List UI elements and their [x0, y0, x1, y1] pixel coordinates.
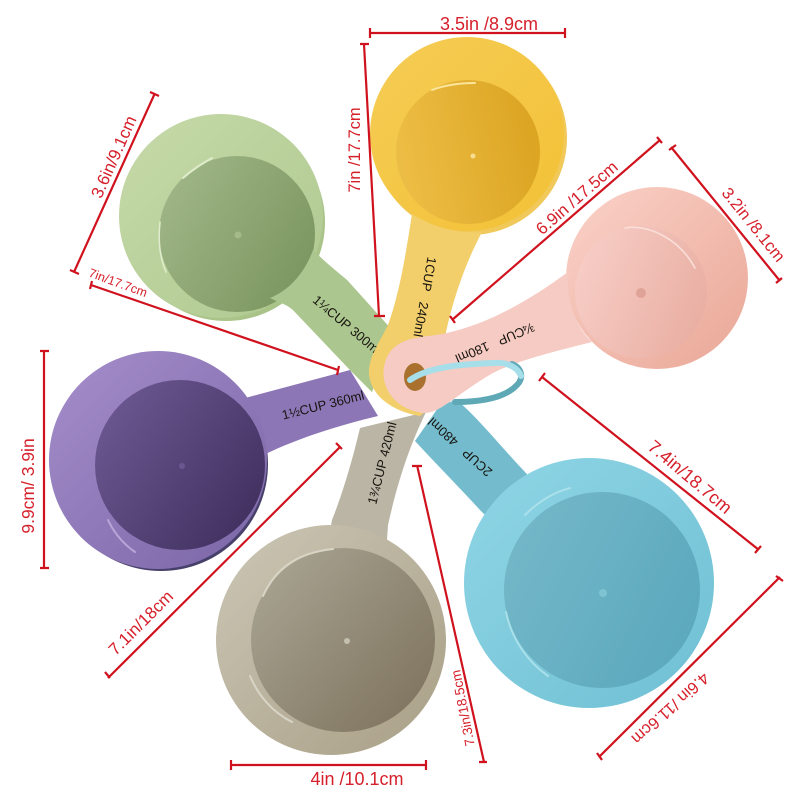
dimension: pink length [450, 137, 662, 323]
cup: blue 2 cup: 2CUP 480ml [425, 414, 495, 480]
cup: yellow 1 cup [369, 37, 567, 416]
cup: yellow 1 cup: 1CUP 240ml [411, 256, 439, 338]
dimension: green width: 3.6in/9.1cm [87, 113, 141, 201]
cup: taupe 1 3/4 cup: 1¾CUP 420ml [365, 420, 400, 506]
dimension: purple width: 9.9cm/ 3.9in [18, 438, 38, 534]
dimension: yellow length [346, 44, 385, 316]
cup: blue 2 cup [415, 400, 714, 708]
dimension: green width [70, 92, 159, 274]
dimension: purple length: 7.1in/18cm [105, 587, 177, 659]
hanging hole [404, 363, 426, 391]
dimension: green length [87, 266, 339, 375]
cup: pink 3/4 cup [383, 187, 748, 413]
dimension: 3.5in [370, 14, 565, 38]
dimension: pink width [669, 145, 788, 283]
dimension: purple width [18, 351, 49, 568]
cup: green 1 1/4 cup [119, 114, 392, 392]
cup: taupe 1 3/4 cup [216, 412, 446, 755]
dimension: purple length [105, 443, 342, 678]
dimension: taupe length [412, 465, 487, 762]
dimension: 3.5in: 3.5in /8.9cm [440, 14, 538, 34]
dimension: yellow length: 7in /17.7cm [346, 107, 364, 193]
cup: pink 3/4 cup: ¾CUP 180ml [453, 320, 537, 366]
dimension: blue length [539, 373, 761, 553]
dimension: green length: 7in/17.7cm [87, 266, 149, 300]
dimension: blue length: 7.4in/18.7cm [644, 436, 736, 518]
dimension: pink width: 3.2in /8.1cm [718, 184, 788, 266]
dimension: pink length: 6.9in /17.5cm [532, 157, 622, 239]
dimension: taupe width [231, 760, 426, 789]
dimension: blue width: 4.6in /11.6cm [628, 669, 712, 747]
dimension: blue width [597, 576, 783, 760]
dimension: taupe width: 4in /10.1cm [310, 769, 404, 789]
dimension: taupe length: 7.3in/18.5cm [448, 669, 478, 747]
loop: hanging ring [410, 363, 521, 402]
cup: green 1 1/4 cup: 1¼CUP 300ml [310, 292, 384, 358]
cup: purple 1 1/2 cup: 1½CUP 360ml [280, 387, 366, 422]
cup: purple 1 1/2 cup [49, 351, 378, 571]
